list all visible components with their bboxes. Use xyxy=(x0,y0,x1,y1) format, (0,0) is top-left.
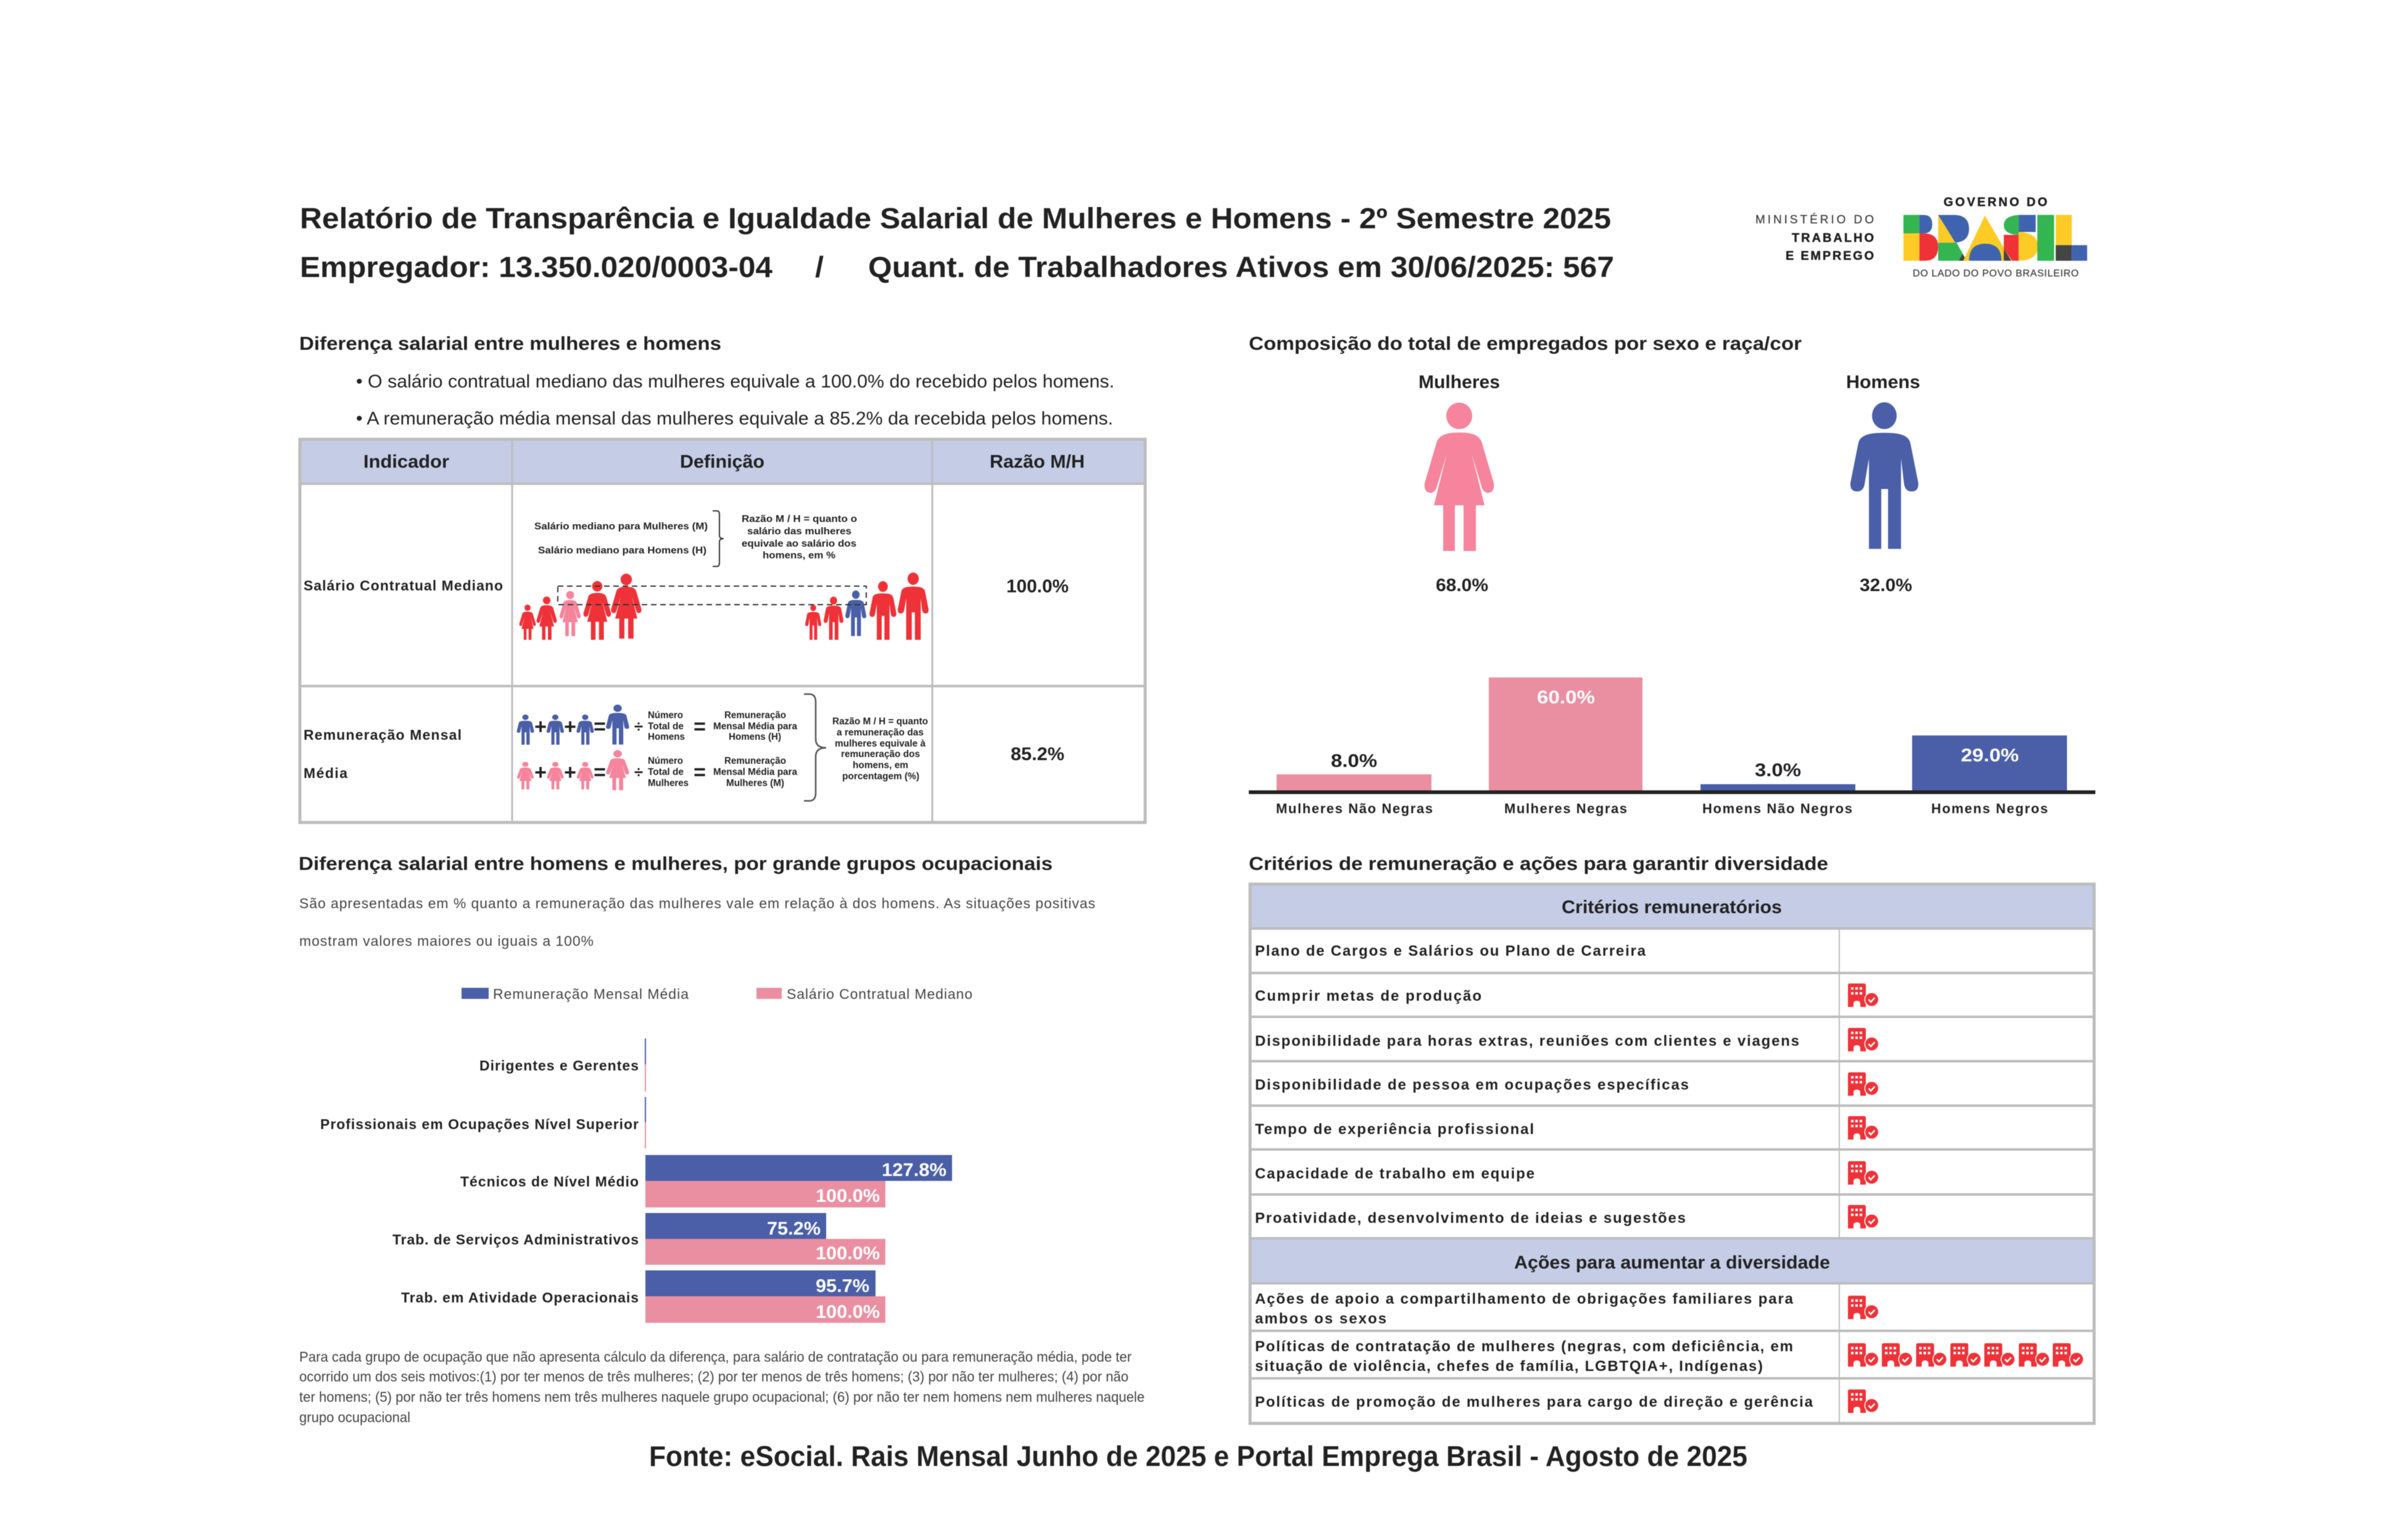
panel: criteria table: Políticas de promoção de mulheres para cargo de direção e gerência xyxy=(1255,1394,1813,1410)
illustration: remuneração média: Total de xyxy=(648,767,684,777)
panel: criteria table: Tempo de experiência profissional xyxy=(1255,1121,1534,1138)
heading: grupos ocupacionais: Diferença salarial entre homens e mulheres, por grande grupos ocupacionais xyxy=(299,853,1053,874)
panel: indicator table: Remuneração Mensal xyxy=(304,727,462,743)
legend xyxy=(462,986,972,1002)
icon: man figure xyxy=(1850,402,1918,549)
logo: Ministério do Trabalho e Emprego: TRABALHO xyxy=(1792,231,1874,245)
bar chart: grupos ocupacionais: 127.8% xyxy=(882,1160,946,1180)
footnote: ocorrido um dos seis motivos:(1) por ter menos de três mulheres; (2) por ter menos de três homens; (3) por não ter mulheres; (4) por não xyxy=(299,1368,1129,1385)
illustration: remuneração média: a remuneração das xyxy=(837,727,924,738)
title: Empregador: 13.350.020/0003-04 xyxy=(300,250,772,283)
bar chart: sexo e raça: Homens Negros xyxy=(1931,801,2048,816)
icons: company check marks xyxy=(1848,983,2084,1413)
bar chart: sexo e raça: Homens Não Negros xyxy=(1702,801,1852,816)
text block: explicação: mostram valores maiores ou iguais a 100% xyxy=(299,933,594,949)
panel: criteria table: Critérios remuneratórios xyxy=(1562,897,1782,917)
text block: explicação xyxy=(299,895,1095,949)
panel: indicator table: Salário Contratual Mediano xyxy=(304,578,503,594)
illustration: salário mediano: Salário mediano para Homens (H) xyxy=(538,545,706,556)
illustration: salário mediano: equivale ao salário dos xyxy=(742,539,856,549)
panel: criteria table: ambos os sexos xyxy=(1255,1310,1386,1327)
panel: criteria table: Políticas de contratação de mulheres (negras, com deficiência, em xyxy=(1255,1338,1793,1355)
legend: Remuneração Mensal Média xyxy=(493,986,689,1002)
illustration: remuneração média: + xyxy=(534,715,547,739)
panel: criteria table: Ações de apoio a compartilhamento de obrigações familiares para xyxy=(1255,1291,1794,1307)
label: Homens: Homens xyxy=(1846,372,1920,392)
title: / xyxy=(815,250,824,283)
illustration: remuneração média: Mulheres (M) xyxy=(726,778,784,789)
illustration: remuneração média: = xyxy=(694,761,706,784)
heading: diferença salarial: Diferença salarial entre mulheres e homens xyxy=(299,333,721,354)
bar chart: grupos ocupacionais: Técnicos de Nível Médio xyxy=(460,1174,639,1190)
illustration: remuneração média: Remuneração xyxy=(724,756,786,766)
panel: criteria table: Cumprir metas de produção xyxy=(1255,988,1481,1004)
text block: explicação: São apresentadas em % quanto a remuneração das mulheres vale em relação à dos homens. As situações positivas xyxy=(299,895,1095,911)
bar chart: grupos ocupacionais: 100.0% xyxy=(816,1243,880,1264)
footnote: grupo ocupacional xyxy=(299,1409,410,1425)
illustration: remuneração média: + xyxy=(534,761,547,784)
logo: Ministério do Trabalho e Emprego: MINISTÉRIO DO xyxy=(1755,213,1874,226)
illustration: salário mediano: Razão M / H = quanto o xyxy=(742,514,857,524)
panel: indicator table: Definição xyxy=(680,452,764,472)
logo: Governo do Brasil: DO LADO DO POVO BRASILEIRO xyxy=(1913,268,2079,279)
bullet: remuneração média: • A remuneração média mensal das mulheres equivale a 85.2% da recebida pelos homens. xyxy=(356,408,1113,429)
panel: criteria table: Disponibilidade para horas extras, reuniões com clientes e viagens xyxy=(1255,1033,1799,1049)
illustration: remuneração média: Número xyxy=(648,710,683,721)
logo: Ministério do Trabalho e Emprego: E EMPREGO xyxy=(1786,249,1874,263)
illustration: remuneração média: Homens (H) xyxy=(729,732,781,742)
illustration: remuneração média: ÷ xyxy=(634,763,643,781)
panel: indicator table xyxy=(300,439,1145,822)
illustration: remuneração média xyxy=(517,694,928,801)
panel: criteria table: Proatividade, desenvolvimento de ideias e sugestões xyxy=(1255,1210,1686,1227)
footnote: Para cada grupo de ocupação que não apresenta cálculo da diferença, para salário de contratação ou para remuneração média, pode ter xyxy=(299,1349,1132,1365)
bar chart: grupos ocupacionais: Profissionais em Ocupações Nível Superior xyxy=(320,1116,639,1132)
value: 68.0%: 68.0% xyxy=(1436,576,1488,595)
illustration: remuneração média: ÷ xyxy=(634,717,643,735)
icon: woman figure xyxy=(1425,402,1494,551)
illustration: remuneração média: Mensal Média para xyxy=(713,767,797,777)
illustration: remuneração média: + xyxy=(564,715,576,739)
illustration: remuneração média: = xyxy=(594,715,606,739)
illustration: remuneração média: Mensal Média para xyxy=(713,721,797,732)
bar chart: sexo e raça: 3.0% xyxy=(1755,760,1801,780)
illustration: remuneração média: Remuneração xyxy=(724,710,786,721)
illustration: remuneração média: Razão M / H = quanto xyxy=(832,716,928,727)
panel: criteria table: Disponibilidade de pessoa em ocupações específicas xyxy=(1255,1077,1689,1093)
bar chart: sexo e raça: Mulheres Negras xyxy=(1504,801,1627,816)
illustration: remuneração média: homens, em xyxy=(853,760,908,771)
panel: indicator table: Razão M/H xyxy=(990,452,1085,472)
logo: Governo do Brasil xyxy=(1903,196,2087,279)
footnote xyxy=(299,1349,1145,1425)
bar chart: sexo e raça xyxy=(1249,677,2095,816)
source line: Fonte: eSocial. Rais Mensal Junho de 2025 e Portal Emprega Brasil - Agosto de 2025 xyxy=(649,1440,1747,1472)
illustration: remuneração média: = xyxy=(594,761,606,784)
legend: Salário Contratual Mediano xyxy=(787,986,972,1002)
panel: indicator table: Média xyxy=(304,765,347,781)
illustration: remuneração média: porcentagem (%) xyxy=(842,771,919,782)
illustration: remuneração média: = xyxy=(694,715,706,739)
bar chart: grupos ocupacionais xyxy=(320,1038,952,1323)
title: Quant. de Trabalhadores Ativos em 30/06/2025: 567 xyxy=(868,250,1614,283)
bullet: salário contratual: • O salário contratual mediano das mulheres equivale a 100.0% do recebido pelos homens. xyxy=(356,371,1114,392)
panel: indicator table: 100.0% xyxy=(1006,576,1069,597)
footnote: ter homens; (5) por não ter três homens nem três mulheres naquele grupo ocupacional; (6) por não ter nem homens nem mulheres naquele xyxy=(299,1389,1145,1405)
title: Relatório de Transparência e Igualdade Salarial de Mulheres e Homens - 2º Semestre 2025 xyxy=(300,202,1611,234)
panel: criteria table: situação de violência, chefes de família, LGBTQIA+, Indígenas) xyxy=(1255,1358,1763,1375)
illustration: salário mediano xyxy=(520,511,929,640)
bar chart: grupos ocupacionais: 100.0% xyxy=(816,1302,880,1322)
panel: criteria table: Ações para aumentar a diversidade xyxy=(1514,1252,1830,1273)
bar chart: sexo e raça: 8.0% xyxy=(1331,751,1377,771)
illustration: remuneração média: Total de xyxy=(648,721,684,732)
heading: critérios: Critérios de remuneração e ações para garantir diversidade xyxy=(1249,853,1828,874)
logo: Ministério do Trabalho e Emprego xyxy=(1755,213,1874,263)
illustration: remuneração média: Número xyxy=(648,756,683,766)
value: 32.0%: 32.0% xyxy=(1860,576,1912,595)
panel: criteria table: Capacidade de trabalho em equipe xyxy=(1255,1165,1535,1182)
bar chart: grupos ocupacionais: 75.2% xyxy=(767,1219,821,1239)
illustration: remuneração média: remuneração dos xyxy=(841,749,920,760)
illustration: remuneração média: Mulheres xyxy=(648,778,689,789)
bar chart: grupos ocupacionais: 100.0% xyxy=(816,1186,880,1206)
illustration: salário mediano: Salário mediano para Mulheres (M) xyxy=(534,521,708,532)
bar chart: sexo e raça: 60.0% xyxy=(1537,687,1595,708)
logo: Governo do Brasil: GOVERNO DO xyxy=(1944,196,2047,209)
illustration: salário mediano: salário das mulheres xyxy=(747,526,851,537)
title xyxy=(300,202,1614,283)
panel: indicator table: Indicador xyxy=(363,452,449,472)
bar chart: sexo e raça: Mulheres Não Negras xyxy=(1276,801,1433,816)
illustration: remuneração média: Homens xyxy=(648,732,685,742)
bar chart: grupos ocupacionais: Trab. em Atividade Operacionais xyxy=(401,1290,639,1306)
bar chart: grupos ocupacionais: 95.7% xyxy=(816,1276,869,1296)
bar chart: sexo e raça: 29.0% xyxy=(1961,745,2019,766)
heading: composição: Composição do total de empregados por sexo e raça/cor xyxy=(1249,333,1802,354)
panel: indicator table: 85.2% xyxy=(1011,744,1064,764)
bar chart: grupos ocupacionais: Dirigentes e Gerentes xyxy=(479,1058,639,1074)
label: Mulheres: Mulheres xyxy=(1419,372,1500,392)
panel: criteria table: Plano de Cargos e Salários ou Plano de Carreira xyxy=(1255,943,1646,959)
panel: criteria table xyxy=(1250,884,2094,1423)
illustration: remuneração média: mulheres equivale à xyxy=(835,739,926,749)
illustration: remuneração média: + xyxy=(564,761,576,784)
illustration: salário mediano: homens, em % xyxy=(763,550,835,561)
bar chart: grupos ocupacionais: Trab. de Serviços Administrativos xyxy=(392,1232,639,1248)
